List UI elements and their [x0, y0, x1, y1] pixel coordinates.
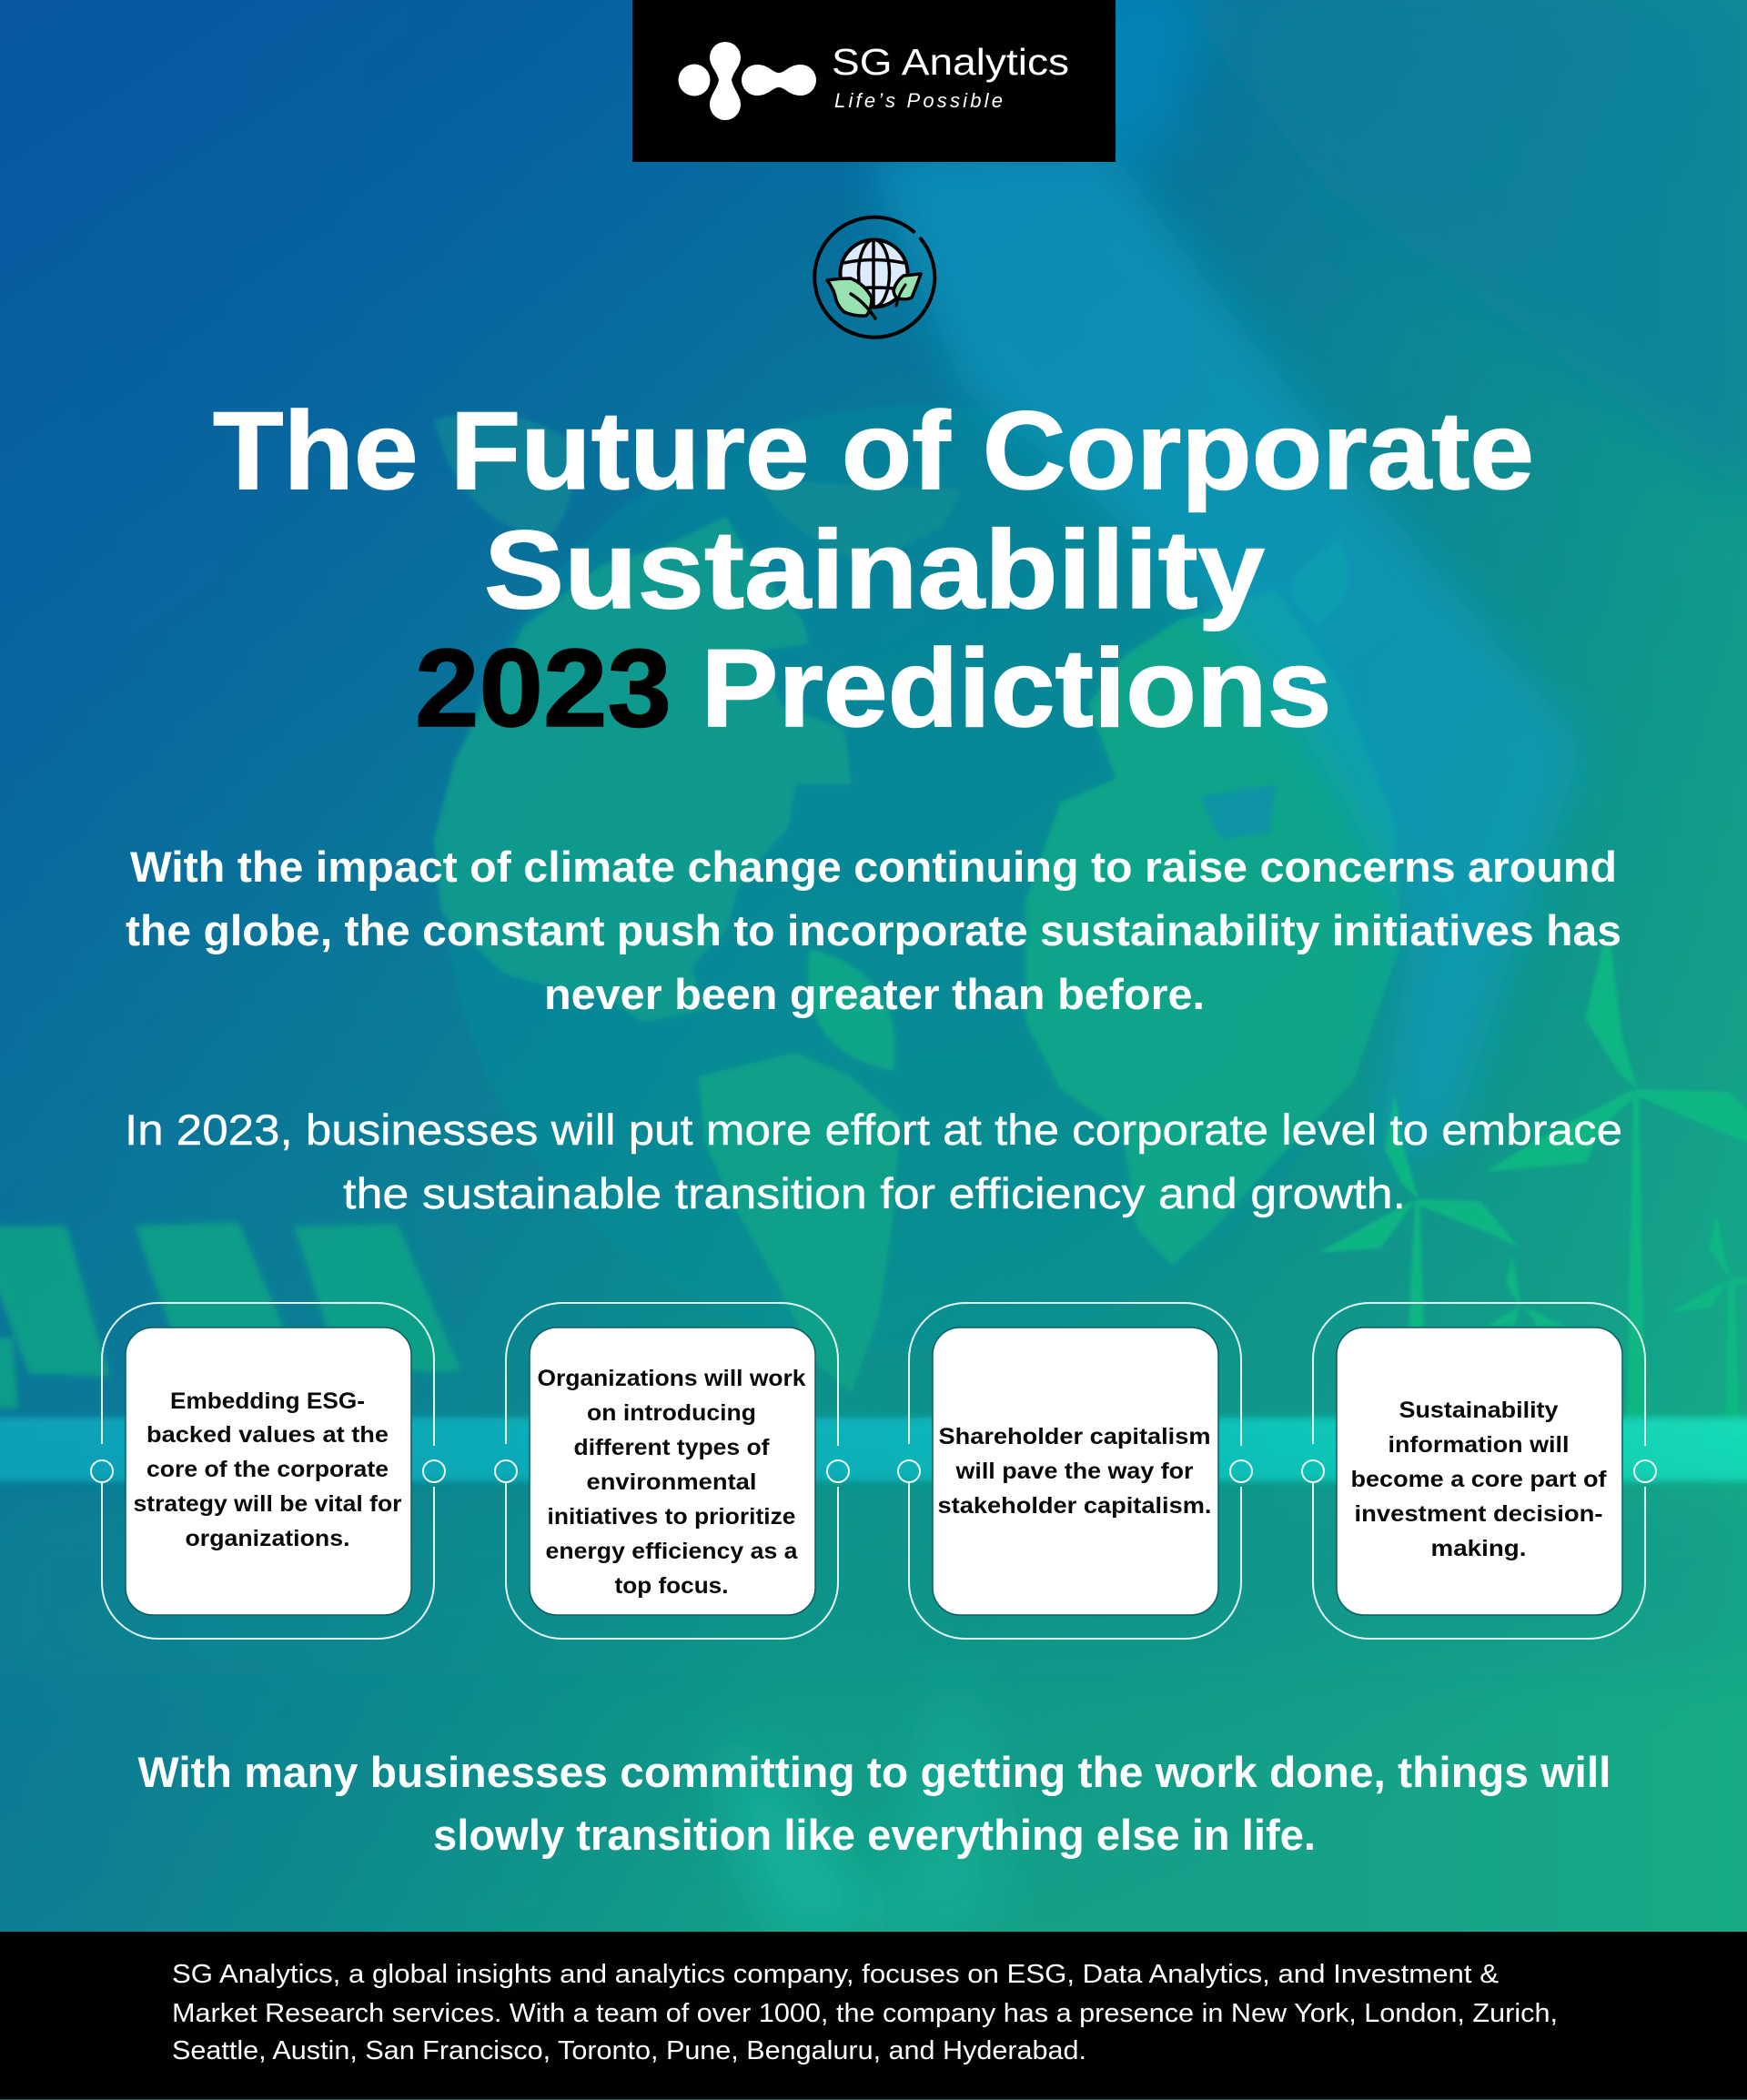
second paragraph	[125, 1106, 1622, 1217]
intro paragraph: never been greater than before.	[544, 970, 1205, 1018]
title	[213, 389, 1534, 750]
footer: SG Analytics, a global insights and analytics company, focuses on ESG, Data Analytics, and Investment &	[172, 1960, 1499, 1989]
footer: Market Research services. With a team of over 1000, the company has a presence in New York, London, Zurich,	[172, 1999, 1558, 2028]
card 4: Sustainability	[1399, 1398, 1559, 1423]
footer	[0, 1932, 1747, 2100]
intro paragraph: the globe, the constant push to incorporate sustainability initiatives has	[126, 906, 1621, 954]
title: 2023	[415, 626, 672, 750]
footer: Seattle, Austin, San Francisco, Toronto, Pune, Bengaluru, and Hyderabad.	[172, 2036, 1086, 2065]
title: The Future of Corporate	[213, 389, 1534, 512]
card 3: Shareholder capitalism	[939, 1424, 1210, 1449]
card 2: on introducing	[587, 1400, 756, 1426]
intro paragraph	[126, 843, 1621, 1018]
logo text	[832, 41, 1069, 112]
card 2: energy efficiency as a	[546, 1539, 799, 1564]
closing statement	[138, 1748, 1611, 1859]
card 2: Organizations will work	[537, 1366, 806, 1391]
card 4: making.	[1430, 1536, 1527, 1561]
card 1: organizations.	[186, 1526, 349, 1551]
glow	[727, 1729, 892, 1933]
title: Predictions	[701, 626, 1332, 750]
light band	[0, 1418, 1747, 1481]
card 4: information will	[1389, 1432, 1569, 1458]
card 2: different types of	[573, 1435, 770, 1460]
card 3: stakeholder capitalism.	[937, 1493, 1212, 1519]
card 2: top focus.	[615, 1573, 728, 1599]
card 1: Embedding ESG-	[170, 1388, 365, 1414]
closing statement: slowly transition like everything else in life.	[433, 1811, 1316, 1859]
wind turbines	[1318, 944, 1747, 1419]
card 1: backed values at the	[146, 1422, 389, 1448]
icon: logo mark	[679, 42, 816, 120]
globe	[434, 405, 1401, 1394]
card 1: strategy will be vital for	[133, 1491, 402, 1517]
title: Sustainability	[484, 508, 1265, 631]
card 4	[1302, 1303, 1656, 1639]
card 3: will pave the way for	[954, 1459, 1194, 1484]
card 2: initiatives to prioritize	[548, 1504, 796, 1530]
blue streaks	[910, 0, 1747, 510]
closing statement: With many businesses committing to getting the work done, things will	[138, 1748, 1611, 1796]
second paragraph: the sustainable transition for efficiency and growth.	[343, 1169, 1406, 1217]
solar panels	[0, 1222, 461, 1408]
card 4: investment decision-	[1354, 1501, 1603, 1527]
card 4: become a core part of	[1350, 1467, 1607, 1492]
logo text: Life’s Possible	[834, 89, 1003, 112]
icon: globe with leaves	[814, 217, 934, 338]
logo text: SG Analytics	[832, 41, 1069, 83]
card 3	[898, 1303, 1252, 1639]
logo box	[632, 0, 1116, 162]
card 2: environmental	[586, 1469, 757, 1495]
card 1: core of the corporate	[146, 1457, 389, 1482]
card 2	[495, 1303, 849, 1639]
intro paragraph: With the impact of climate change continuing to raise concerns around	[130, 843, 1617, 891]
card 1	[91, 1303, 445, 1639]
bright arm streak	[864, 155, 1583, 1174]
second paragraph: In 2023, businesses will put more effort at the corporate level to embrace	[125, 1106, 1622, 1154]
